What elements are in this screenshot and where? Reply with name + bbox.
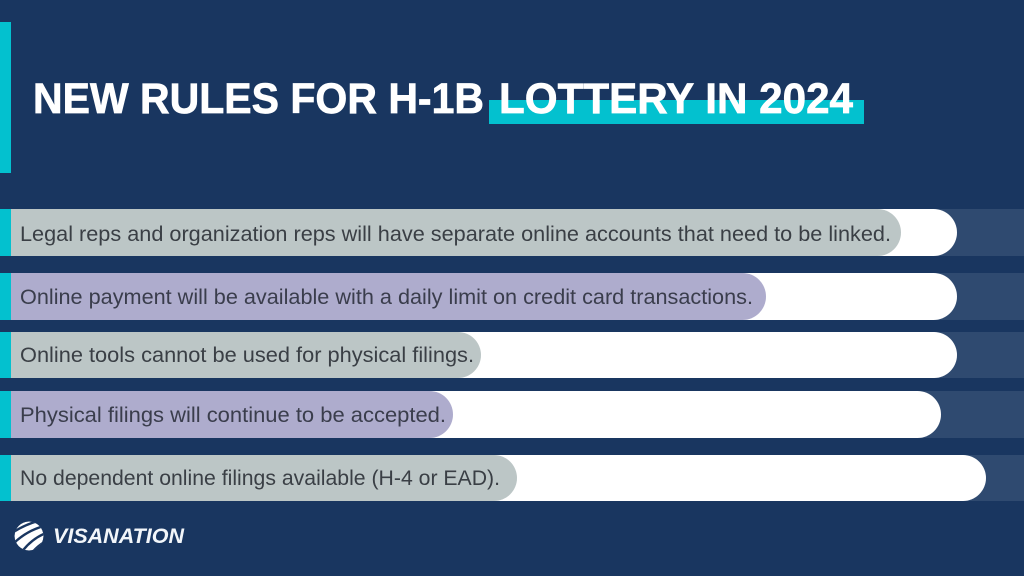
rule 4 text: Physical filings will continue to be accepted. xyxy=(20,404,446,427)
title: NEW RULES FOR H-1B xyxy=(33,75,484,123)
rule row 4 xyxy=(0,391,1024,438)
rule row 1 xyxy=(0,209,1024,256)
title xyxy=(33,75,853,123)
icon: striped globe xyxy=(14,522,44,550)
title: LOTTERY IN 2024 xyxy=(499,75,853,123)
rule 1 text: Legal reps and organization reps will have separate online accounts that need to be linked. xyxy=(20,223,891,246)
rule 5 text: No dependent online filings available (H-4 or EAD). xyxy=(20,467,500,490)
rule row 5 xyxy=(0,455,1024,501)
accent bar: title xyxy=(0,22,11,173)
logo wordmark: VISANATION xyxy=(53,525,185,548)
logo: VisaNation xyxy=(14,522,184,550)
rule 3 text: Online tools cannot be used for physical filings. xyxy=(20,344,474,367)
title highlight xyxy=(489,100,864,124)
rule row 3 xyxy=(0,332,1024,378)
rule 2 text: Online payment will be available with a daily limit on credit card transactions. xyxy=(20,286,753,309)
rule row 2 xyxy=(0,273,1024,320)
